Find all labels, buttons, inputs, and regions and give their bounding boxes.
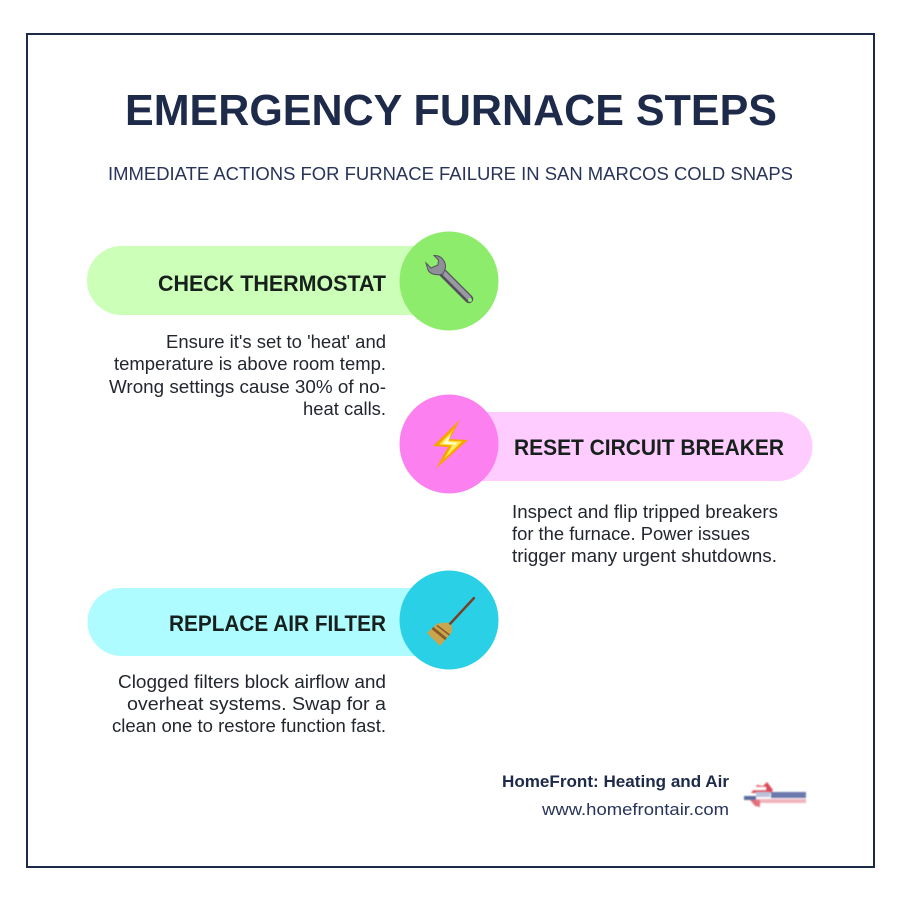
footer website: www.homefrontair.com (541, 800, 729, 819)
step 2 pill (460, 412, 813, 481)
step 2 description: trigger many urgent shutdowns. (512, 546, 777, 566)
icon: lightning bolt (433, 420, 468, 468)
step 1 description (109, 332, 386, 419)
step 1 pill (87, 246, 440, 315)
step 3 description: overheat systems. Swap for a (127, 694, 387, 714)
step 3 description: Clogged filters block airflow and (118, 672, 386, 692)
step 2 description: Inspect and flip tripped breakers (512, 502, 778, 522)
step 1 heading: CHECK THERMOSTAT (158, 271, 386, 296)
step 3 pill (88, 588, 440, 656)
step 2 description (512, 502, 778, 566)
step 1 description: heat calls. (303, 399, 386, 419)
step 3 heading: REPLACE AIR FILTER (169, 611, 386, 636)
step 2 description: for the furnace. Power issues (512, 524, 750, 544)
step 2 heading: RESET CIRCUIT BREAKER (514, 435, 784, 460)
step 2 icon circle (400, 394, 498, 494)
step 3 icon circle (400, 570, 498, 670)
step 1 icon circle (400, 232, 498, 330)
panel: step 2 reset circuit breaker (400, 394, 813, 566)
step 1 description: Wrong settings cause 30% of no- (109, 377, 386, 397)
icon: broom (427, 598, 474, 646)
footer company name: HomeFront: Heating and Air (502, 772, 729, 791)
step 3 description: clean one to restore function fast. (112, 716, 386, 736)
panel: step 3 replace air filter (88, 570, 498, 736)
icon: wrench (426, 255, 472, 302)
step 1 description: Ensure it's set to 'heat' and (166, 332, 386, 352)
logo (744, 782, 806, 807)
step 3 description (112, 672, 387, 736)
subtitle: IMMEDIATE ACTIONS FOR FURNACE FAILURE IN SAN MARCOS COLD SNAPS (108, 163, 793, 184)
step 1 description: temperature is above room temp. (114, 354, 386, 374)
title: EMERGENCY FURNACE STEPS (125, 86, 777, 135)
panel: step 1 check thermostat (87, 232, 499, 419)
